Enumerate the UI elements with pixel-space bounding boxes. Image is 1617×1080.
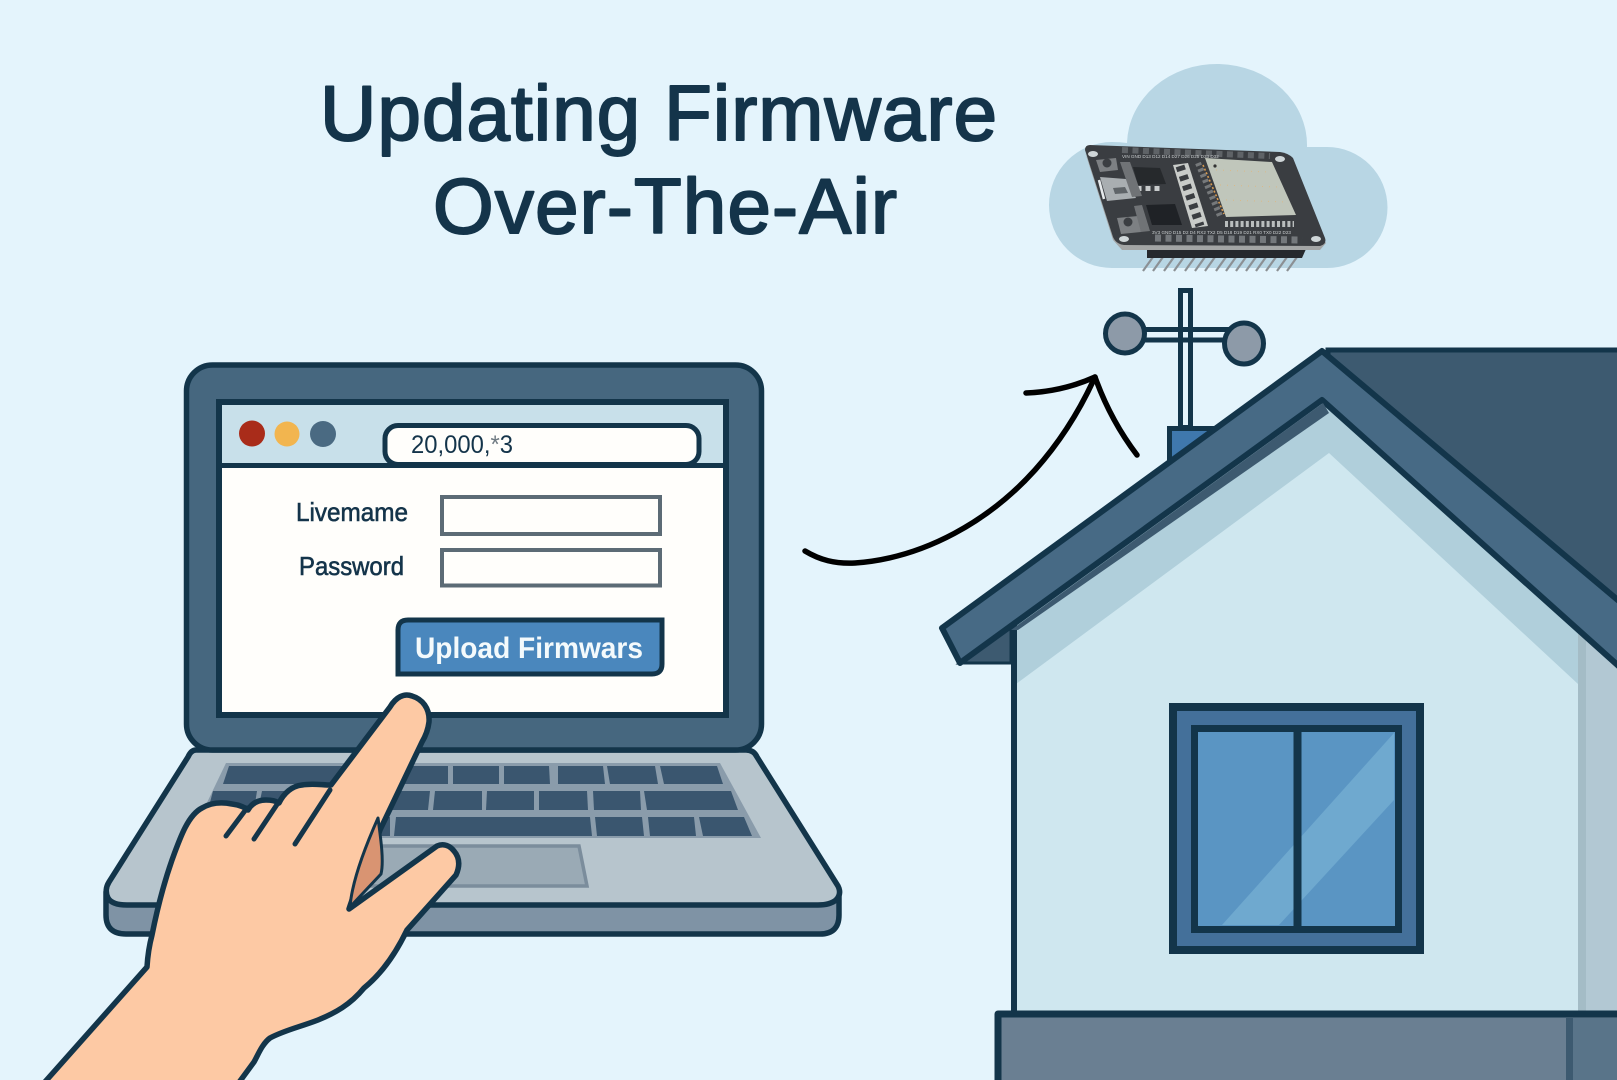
- voltage regulator: [1133, 167, 1166, 185]
- left resistor strip: [1120, 162, 1142, 197]
- back roof: [1328, 350, 1617, 660]
- window reflection: [1222, 733, 1394, 925]
- palm shadow sliver: [350, 818, 382, 907]
- boot button: [1096, 158, 1118, 172]
- module bottom contacts: [1225, 221, 1294, 227]
- house foundation: [998, 1014, 1617, 1080]
- USB bridge chip: [1146, 204, 1182, 225]
- eave underside: [960, 625, 1011, 663]
- board pin labels: [1122, 154, 1291, 235]
- password field: [442, 550, 660, 586]
- front roof band: [942, 351, 1617, 678]
- white component column: [1173, 163, 1208, 228]
- hand pointing at button: [36, 695, 459, 1080]
- title: [320, 69, 997, 250]
- board pins: [1143, 257, 1297, 271]
- window: [1173, 707, 1420, 950]
- laptop base front: [106, 894, 839, 934]
- title: Over-The-Air: [433, 162, 897, 250]
- component column detail: [1180, 166, 1200, 226]
- icon: anemometer antenna: [1106, 290, 1264, 478]
- touchpad: [372, 846, 587, 886]
- board surface: [1085, 145, 1325, 246]
- arrow: laptop to antenna: [805, 377, 1137, 563]
- window outer frame: [1173, 707, 1420, 950]
- upload button: [398, 620, 662, 674]
- enable button cap: [1124, 218, 1132, 226]
- mast crossing: [1180, 329, 1190, 341]
- browser toolbar: [222, 405, 723, 464]
- wall corner strip: [1578, 620, 1586, 1012]
- username label: Livemame: [296, 497, 408, 527]
- minimise dot: [274, 422, 300, 446]
- house wall: [1014, 370, 1617, 1015]
- foundation corner line: [1566, 1018, 1573, 1080]
- pin header: [1147, 249, 1306, 258]
- board pin labels: 3V3 GND D15 D2 D4 RX2 TX2 D5 D18 D19 D21 RX0 TX0 D22 D23: [1152, 230, 1291, 235]
- USB port highlight: [1099, 180, 1104, 199]
- top header pads: [1122, 150, 1270, 156]
- window glass: [1194, 728, 1398, 930]
- keyboard keys: [208, 766, 752, 836]
- window mullion: [1294, 730, 1302, 927]
- upload button label: Upload Firmwars: [415, 632, 643, 665]
- left cup: [1106, 314, 1144, 353]
- wall shadow under the eaves: [1016, 392, 1578, 684]
- screen: [219, 402, 726, 715]
- laptop lid: [186, 365, 762, 750]
- close dot: [239, 420, 265, 446]
- icon: ESP32 development board: [1085, 145, 1326, 271]
- enable button: [1117, 216, 1141, 234]
- username field: [442, 497, 660, 534]
- antenna crossarm: [1142, 330, 1228, 340]
- board mounting holes: [1088, 151, 1321, 242]
- icon: house: [942, 350, 1617, 1080]
- board edge: [1085, 152, 1326, 250]
- laptop base top: [106, 750, 840, 905]
- maximise dot: [310, 421, 336, 447]
- boot button cap: [1102, 158, 1112, 168]
- finger gaps: [226, 790, 330, 844]
- shield marker dot: [1213, 164, 1217, 168]
- laptop: [106, 365, 840, 934]
- shield speckle: [1216, 170, 1286, 202]
- foundation side: [1570, 1018, 1617, 1080]
- keyboard well: [190, 763, 761, 838]
- toolbar divider: [222, 463, 723, 468]
- USB port opening: [1113, 187, 1128, 194]
- wall side panel: [1586, 620, 1617, 1015]
- antenna base: [1170, 428, 1212, 478]
- regulator pins: [1139, 186, 1157, 191]
- micro USB port: [1100, 177, 1136, 201]
- right cup: [1224, 323, 1264, 364]
- antenna mast: [1180, 290, 1190, 428]
- bottom header pads: [1155, 238, 1302, 240]
- lower resistor strip: [1134, 205, 1150, 232]
- hand shape: [36, 695, 459, 1080]
- module side castellations: [1198, 163, 1220, 216]
- roof inner shade: [1011, 403, 1329, 630]
- title: Updating Firmware: [320, 69, 997, 157]
- address bar: [385, 426, 699, 464]
- ESP32 metal shield: [1205, 158, 1296, 217]
- wall left edge: [1011, 620, 1017, 1012]
- foundation front: [998, 1014, 1617, 1080]
- password label: Password: [299, 551, 404, 581]
- icon: cloud: [1049, 64, 1388, 268]
- module orange contacts: [1203, 165, 1224, 214]
- board pin labels: VIN GND D13 D12 D14 D27 D26 D25 D33 D32: [1122, 154, 1219, 159]
- address text: 20,000,*3: [411, 431, 513, 459]
